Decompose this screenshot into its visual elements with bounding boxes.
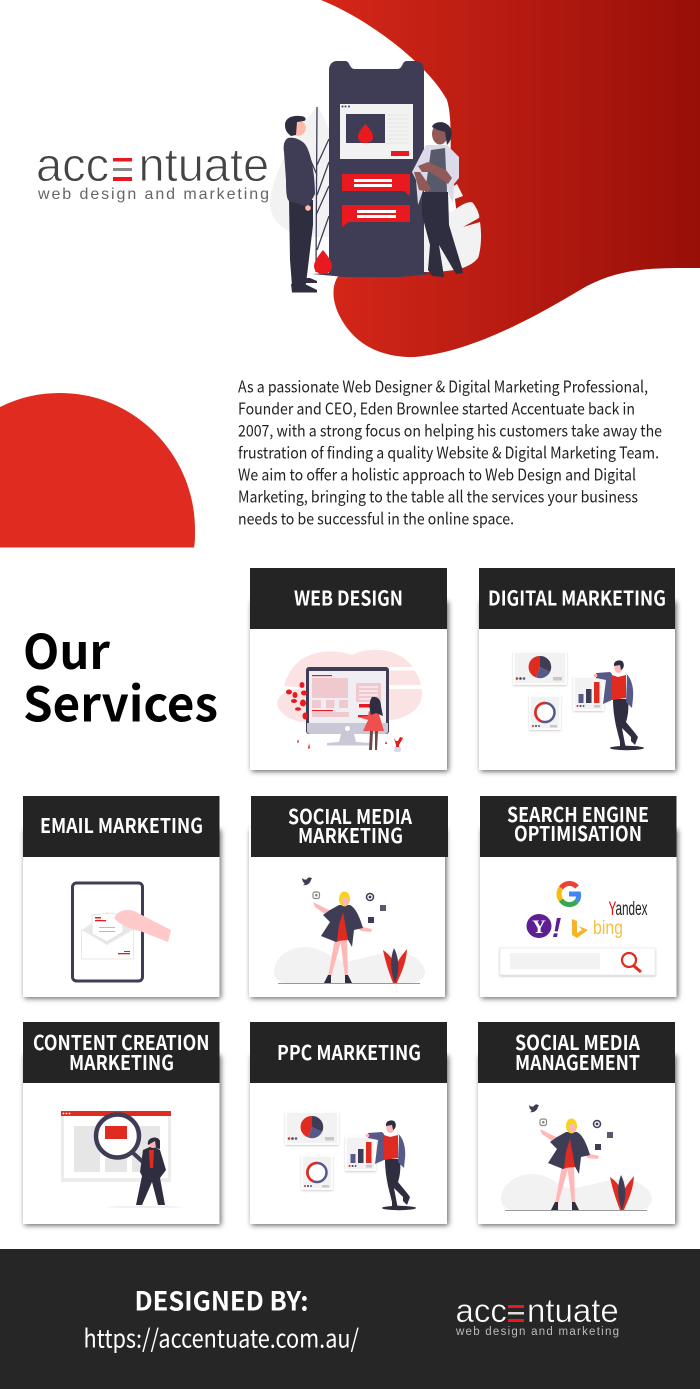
icon: yahoo bbox=[526, 912, 561, 943]
illustration: monitor with woman bbox=[277, 650, 424, 752]
footer bbox=[0, 1249, 700, 1389]
footer url: https://accentuate.com.au/ bbox=[84, 1320, 359, 1356]
icon: google bbox=[559, 883, 579, 905]
intro text block: Founder and CEO, Eden Brownlee started Accentuate back in bbox=[238, 396, 635, 420]
title: WEB DESIGN bbox=[294, 582, 403, 612]
logo: accentuate: acc bbox=[36, 138, 109, 191]
heading: Our Services: Our bbox=[23, 613, 110, 683]
header bbox=[250, 1022, 447, 1083]
title: MARKETING bbox=[69, 1047, 174, 1076]
illustration: woman with social icons bbox=[274, 877, 425, 984]
title: DIGITAL MARKETING bbox=[488, 582, 666, 612]
panel: content creation marketing bbox=[23, 1022, 220, 1224]
title: SOCIAL MEDIA bbox=[288, 801, 412, 830]
intro text block: As a passionate Web Designer & Digital Marketing Professional, bbox=[238, 374, 648, 398]
title bbox=[288, 801, 412, 849]
header bbox=[480, 796, 676, 857]
icon and text: bing bbox=[572, 918, 623, 939]
panel: digital marketing bbox=[479, 568, 675, 770]
illustration: analytics with man bbox=[514, 652, 644, 750]
footer heading: DESIGNED BY: bbox=[134, 1282, 308, 1318]
panel: ppc marketing bbox=[250, 1022, 447, 1224]
intro text block: We aim to offer a holistic approach to Web Design and Digital bbox=[238, 462, 636, 486]
title: SEARCH ENGINE bbox=[507, 799, 649, 828]
title: CONTENT CREATION bbox=[33, 1027, 210, 1056]
header bbox=[251, 796, 448, 857]
footer logo bbox=[455, 1292, 619, 1338]
illustration: analytics with man bbox=[286, 1112, 416, 1210]
illustration: tablet with envelope bbox=[72, 883, 171, 981]
icon and text: bing: bing bbox=[593, 918, 623, 939]
header bbox=[23, 796, 220, 857]
chat bubble one bbox=[342, 174, 410, 196]
header bbox=[23, 1022, 220, 1083]
heading: Our Services bbox=[23, 613, 218, 736]
panel: social media marketing bbox=[249, 796, 448, 997]
icon: right grey leaf bbox=[424, 184, 481, 272]
title: MARKETING bbox=[298, 820, 403, 849]
icon: yahoo: ! bbox=[552, 912, 561, 943]
title bbox=[507, 799, 649, 847]
illustration: browser with magnifier and woman bbox=[61, 1111, 183, 1208]
hero gradient blob bbox=[321, 0, 700, 357]
panel: web design bbox=[250, 568, 447, 770]
footer logo: web design and marketing bbox=[455, 1326, 619, 1338]
logo: accentuate bbox=[36, 138, 269, 203]
title bbox=[515, 1027, 640, 1076]
icon: yahoo: Y bbox=[532, 917, 546, 938]
title: PPC MARKETING bbox=[277, 1037, 421, 1066]
illustration: woman with social icons bbox=[501, 1104, 652, 1211]
icon: grey leaf and stalk bbox=[270, 107, 329, 272]
text logo: yandex: Yandex bbox=[608, 899, 648, 920]
logo: accentuate: web design and marketing bbox=[37, 186, 269, 203]
hero illustration: phone and two people bbox=[270, 61, 481, 292]
title: EMAIL MARKETING bbox=[40, 810, 203, 839]
phone screen panel bbox=[340, 104, 413, 159]
intro text block: needs to be successful in the online space. bbox=[238, 506, 514, 530]
footer logo: ntuate bbox=[527, 1292, 619, 1329]
logo: accentuate: ntuate bbox=[138, 138, 269, 191]
chat bubble two bbox=[342, 205, 410, 227]
phone bbox=[312, 61, 432, 277]
heading: Our Services: Services bbox=[23, 666, 218, 736]
title: OPTIMISATION bbox=[514, 818, 642, 847]
intro text block bbox=[238, 374, 662, 530]
title: SOCIAL MEDIA bbox=[515, 1027, 640, 1056]
header bbox=[250, 568, 447, 629]
title bbox=[33, 1027, 210, 1076]
decorative red circle bbox=[0, 393, 195, 548]
footer logo: acc bbox=[456, 1292, 507, 1329]
person: right man bbox=[412, 122, 463, 277]
header bbox=[479, 568, 675, 629]
search bar bbox=[500, 948, 655, 975]
title: MANAGEMENT bbox=[515, 1047, 640, 1076]
panel: email marketing bbox=[23, 796, 220, 997]
header bbox=[478, 1022, 675, 1083]
panel: search engine optimisation bbox=[480, 796, 676, 997]
panel: social media management bbox=[478, 1022, 675, 1224]
icon: red leaf bbox=[314, 250, 332, 274]
person: left man bbox=[284, 116, 317, 292]
intro text block: Marketing, bringing to the table all the services your business bbox=[238, 484, 638, 508]
